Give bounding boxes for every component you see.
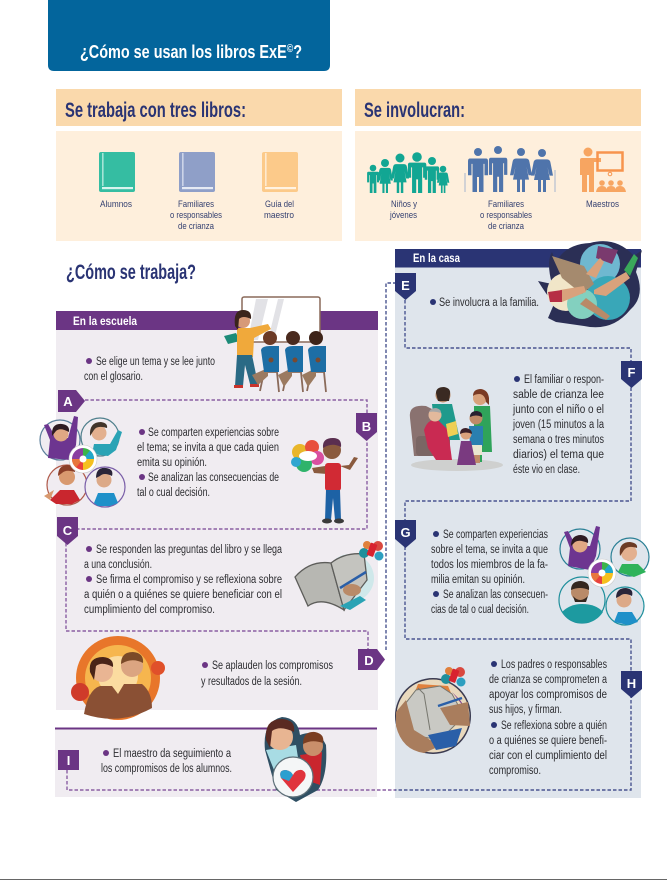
tag C: C	[63, 523, 73, 538]
label: Guía del maestro: Guía del	[265, 199, 294, 210]
tag A: A	[63, 394, 73, 409]
subheading: at home: En la casa	[413, 251, 460, 265]
rainbow splash	[291, 440, 324, 472]
text: step G: milia emitan su opinión.	[431, 574, 525, 586]
label: Familiares: Familiares	[178, 199, 214, 210]
text: step F: El familiar o respon-	[524, 374, 604, 386]
title banner: ?	[293, 42, 302, 62]
text: step A: Se elige un tema y se lee junto	[96, 356, 215, 368]
text: step H: apoyar los compromisos de	[489, 689, 607, 701]
text: step H: o a quiénes se quiere benefi-	[489, 735, 607, 747]
person	[312, 438, 358, 524]
panel: at home	[395, 249, 641, 798]
text: step B: emita su opinión.	[137, 457, 207, 469]
child in teal	[81, 418, 122, 456]
text: step G: todos los miembros de la fa-	[431, 559, 548, 571]
label: Familiares: Familiares	[488, 199, 524, 210]
tag A	[58, 390, 85, 412]
tag D	[358, 649, 385, 670]
text: step I: El maestro da seguimiento a	[113, 748, 231, 760]
rainbow bubble	[69, 445, 97, 473]
tag I: I	[67, 753, 70, 768]
label: Familiares: o responsables	[170, 210, 222, 221]
whiteboard	[242, 297, 320, 342]
title banner: ©	[287, 43, 293, 55]
icon: children and youth	[367, 152, 449, 193]
text: step G: cias de tal o cual decisión.	[431, 604, 529, 616]
child in purple	[40, 416, 80, 460]
tag G	[395, 520, 416, 548]
illustration: joined hands	[538, 241, 642, 327]
woman in green	[611, 538, 649, 577]
label: Niños y jóvenes: Niños y	[391, 199, 417, 210]
child in blue	[606, 587, 644, 625]
text: step I: los compromisos de los alumnos.	[101, 763, 232, 775]
illustration: signing the book (school)	[295, 541, 384, 610]
illustration: children applauding	[71, 636, 165, 720]
rainbow bubble	[588, 559, 616, 587]
panel: follow-up	[55, 728, 377, 797]
text: step H: de crianza se comprometen a	[489, 674, 607, 686]
panel: three books	[56, 89, 342, 241]
tag I	[58, 750, 79, 770]
dashed path: home steps	[386, 283, 631, 790]
illustration: children holding heart globe	[265, 717, 326, 802]
text: step A: con el glosario.	[84, 371, 143, 383]
icon: teacher at screen	[580, 148, 626, 192]
illustration: signing the book (home)	[395, 667, 471, 754]
text: step G	[431, 529, 548, 616]
text: step A	[84, 356, 215, 383]
text: step C: Se responden las preguntas del libro y se llega	[96, 544, 282, 556]
icon: parents and guardians	[465, 146, 555, 192]
text: step H	[489, 659, 607, 777]
icon: orange book	[262, 152, 298, 192]
illustration: family reading	[410, 387, 503, 471]
text: step F: junto con el niño o el	[512, 404, 604, 416]
heading: involved: Se involucran:	[364, 99, 465, 122]
text: step C: Se firma el compromiso y se reflexiona sobre	[96, 574, 282, 586]
text: step C: a quién o a quiénes se quiere beneficiar con el	[84, 589, 282, 601]
label: Familiares: o responsables	[480, 210, 532, 221]
text: step I	[101, 748, 232, 775]
label: Familiares: de crianza	[178, 221, 215, 232]
tag D: D	[364, 653, 374, 668]
text: step B	[137, 427, 279, 499]
tag F	[621, 361, 642, 388]
illustration: teacher and students	[224, 297, 326, 392]
text: step H: Los padres o responsables	[501, 659, 607, 671]
text: step B: Se analizan las consecuencias de	[148, 472, 279, 484]
text: step H: compromiso.	[489, 765, 541, 777]
label: Maestros: Maestros	[586, 199, 619, 210]
child in red	[44, 465, 87, 505]
tag H	[621, 671, 642, 698]
students	[252, 331, 326, 392]
text: step C	[84, 544, 282, 616]
tag E	[395, 273, 416, 300]
text: step F: diarios) el tema que	[513, 449, 604, 461]
text: step C: cumplimiento del compromiso.	[84, 604, 215, 616]
tag B	[356, 413, 377, 441]
text: step C: a una conclusión.	[84, 559, 152, 571]
label: Niños y jóvenes: jóvenes	[389, 210, 417, 221]
label: Guía del maestro: maestro	[264, 210, 294, 221]
text: step D	[201, 660, 333, 688]
child in blue	[85, 467, 125, 507]
label: Niños y jóvenes	[389, 199, 417, 221]
title banner	[48, 0, 330, 71]
illustration: person with rainbow idea	[291, 438, 358, 524]
text: step D: Se aplauden los compromisos	[212, 660, 333, 672]
tag H: H	[627, 676, 636, 691]
label: Guía del maestro	[264, 199, 294, 221]
tag G: G	[400, 525, 411, 540]
text: step B: el tema; se invita a que cada quien	[137, 442, 279, 454]
text: step B: Se comparten experiencias sobre	[148, 427, 279, 439]
tag B: B	[362, 419, 371, 434]
text: step F: éste vio en clase.	[513, 464, 580, 476]
heading: three books: Se trabaja con tres libros:	[65, 99, 246, 122]
tag E: E	[401, 278, 410, 293]
illustration: family group sharing experiences	[559, 526, 649, 625]
tag F: F	[628, 365, 636, 380]
text: step G: Se analizan las consecuen-	[443, 589, 548, 601]
illustration: group sharing experiences (school)	[40, 416, 125, 507]
child in purple	[560, 526, 600, 570]
title banner: ¿Cómo se usan los libros ExE	[80, 42, 338, 62]
text: step G: sobre el tema, se invita a que	[431, 544, 548, 556]
text: step F: joven (15 minutos a la	[512, 419, 604, 431]
text: step H: Se reflexiona sobre a quién	[501, 720, 607, 732]
subheading: at school: En la escuela	[73, 314, 137, 328]
text: step G: Se comparten experiencias	[443, 529, 548, 541]
man in teal	[559, 577, 605, 623]
label: Familiares: de crianza	[488, 221, 525, 232]
teacher	[224, 310, 271, 388]
label: Familiares	[170, 199, 222, 232]
icon: green book	[99, 152, 135, 192]
text: step E: Se involucra a la familia.	[439, 297, 539, 309]
heading: how it works: ¿Cómo se trabaja?	[66, 261, 196, 284]
icon: blue book	[179, 152, 215, 192]
label: Familiares	[480, 199, 532, 232]
dashed path: school steps	[66, 400, 395, 790]
text: step B: tal o cual decisión.	[137, 487, 210, 499]
panel: at school	[56, 311, 378, 710]
text: step D: y resultados de la sesión.	[201, 676, 302, 688]
text: step H: sus hijos, y firman.	[489, 704, 562, 716]
text: step F: sable de crianza lee	[513, 389, 604, 401]
panel: who is involved	[355, 89, 641, 241]
text: step F	[512, 374, 604, 476]
text: step F: semana o tres minutos	[513, 434, 604, 446]
text: step H: ciar con el cumplimiento del	[489, 750, 607, 762]
label: Alumnos: Alumnos	[100, 199, 132, 210]
tag C	[57, 517, 78, 545]
